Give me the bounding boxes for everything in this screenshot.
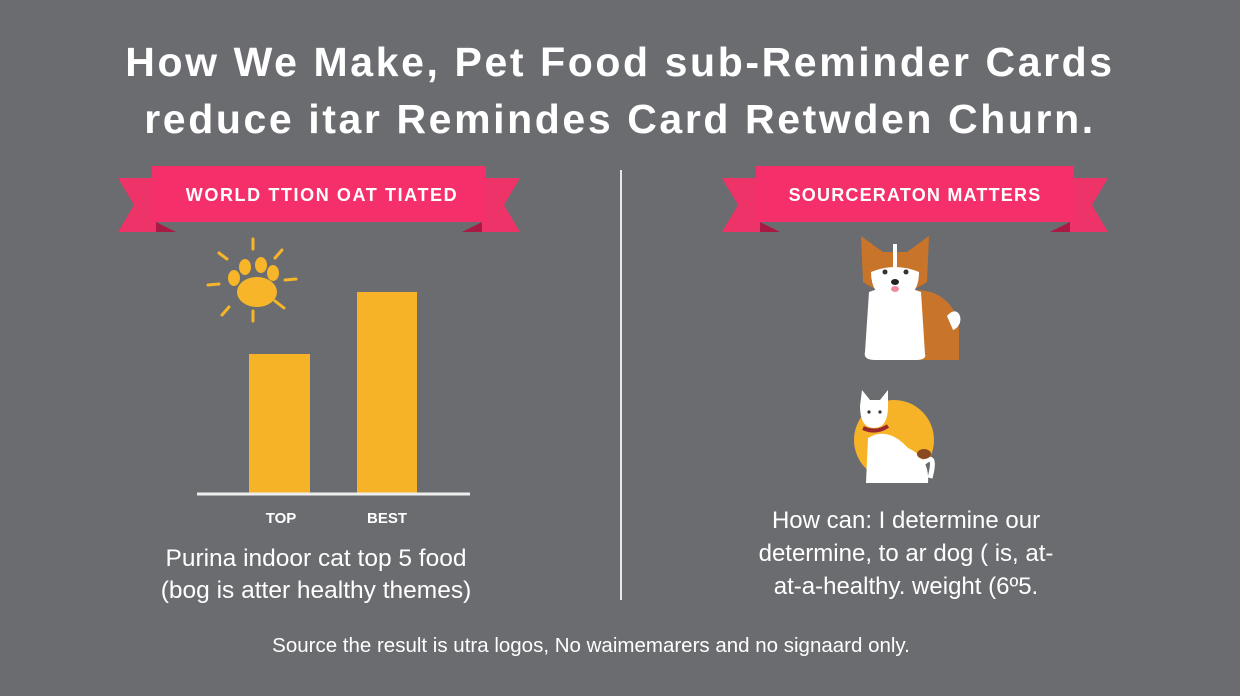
icon: dog [861, 236, 960, 360]
bar chart: TOP [266, 510, 296, 527]
title [125, 39, 1115, 142]
footer: Source the result is utra logos, No waimemarers and no signaard only. [272, 634, 910, 657]
ribbon: right: SOURCERATON MATTERS [789, 185, 1041, 205]
text: right caption: at-a-healthy. weight (6º5. [774, 573, 1038, 600]
ribbon: right [722, 166, 1108, 232]
divider [620, 170, 622, 600]
text: left caption: (bog is atter healthy themes) [161, 577, 471, 604]
title: reduce itar Remindes Card Retwden Churn. [144, 96, 1096, 142]
icon: cat [854, 390, 935, 483]
text: left caption: Purina indoor cat top 5 food [165, 545, 466, 572]
bar chart: BEST [367, 510, 407, 527]
ribbon: left [118, 166, 520, 232]
text: left caption [161, 545, 471, 604]
text: right caption: How can: I determine our [772, 507, 1040, 534]
icon: paw sun [206, 238, 298, 322]
text: right caption: determine, to ar dog ( is, at- [759, 540, 1053, 567]
bar chart [197, 292, 470, 527]
ribbon: left: WORLD TTION OAT TIATED [186, 185, 458, 205]
text: right caption [759, 507, 1053, 600]
title: How We Make, Pet Food sub-Reminder Cards [125, 39, 1115, 85]
